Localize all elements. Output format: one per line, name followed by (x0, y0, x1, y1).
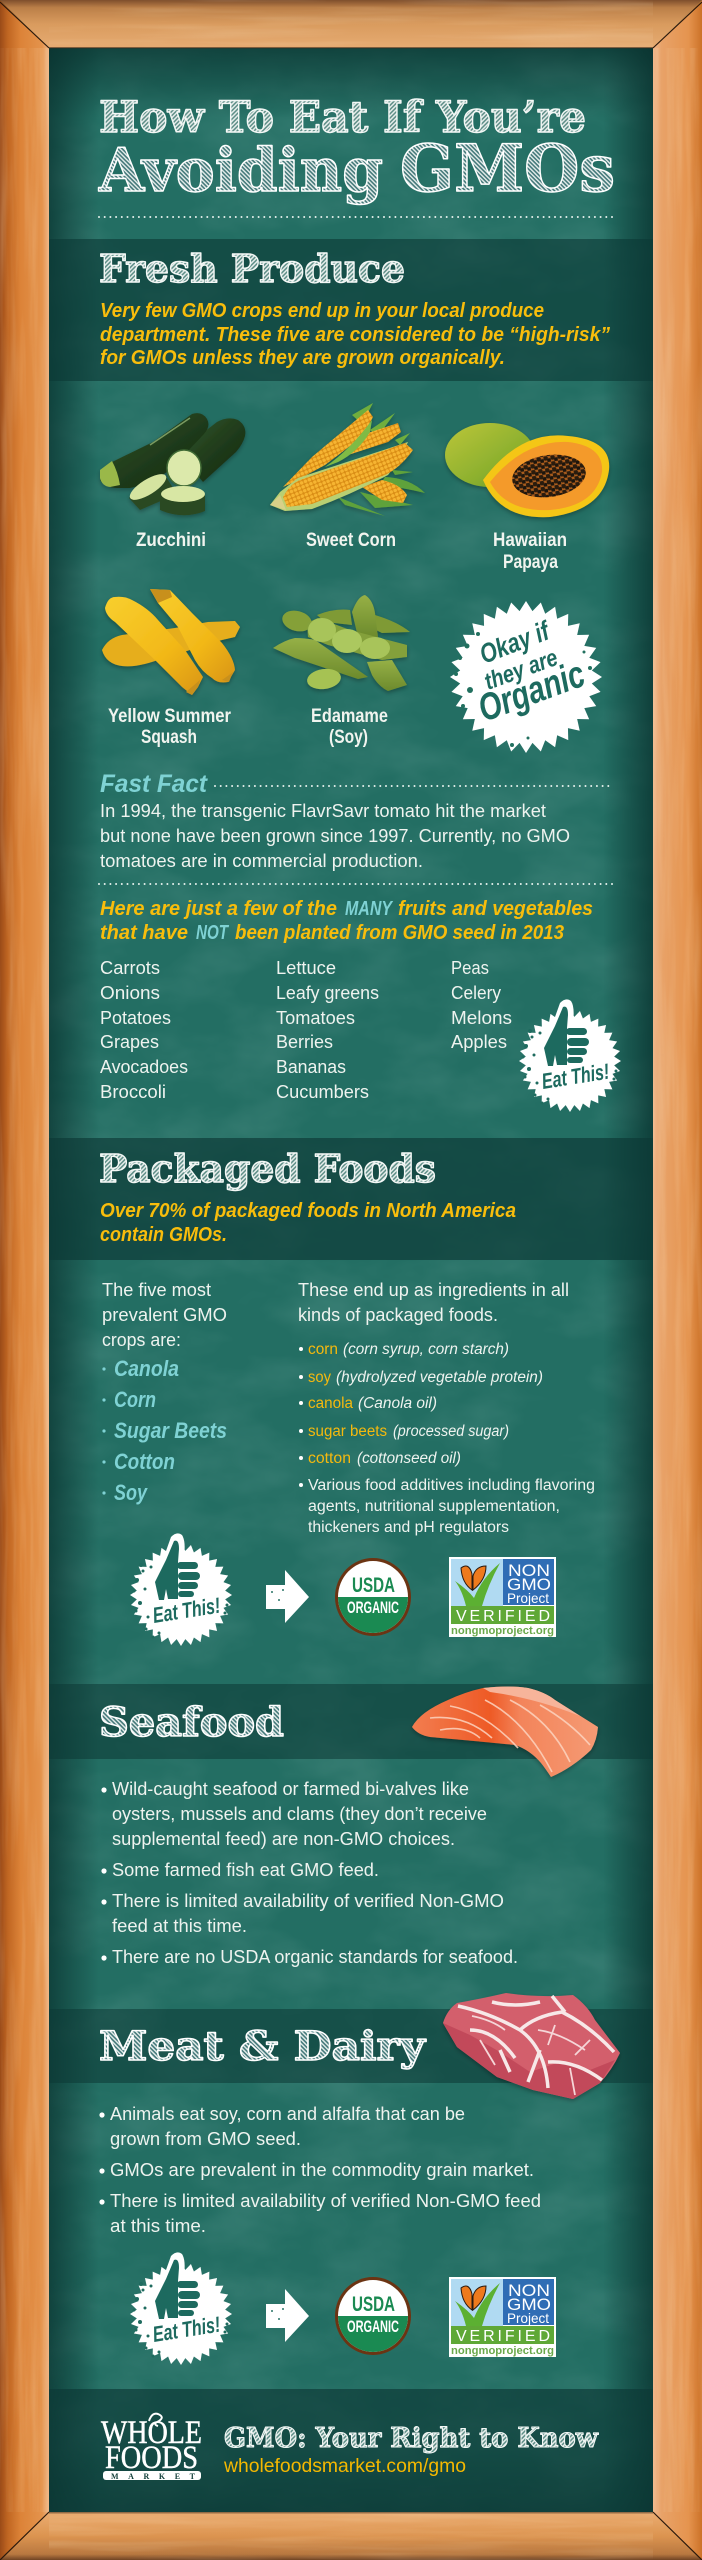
list: column two: Tomatoes (276, 1008, 355, 1028)
list: column three: Melons (451, 1008, 512, 1028)
text: non-GMO fruits and vegetables intro: Here are just a few of the (100, 898, 337, 920)
band: footer (49, 2389, 653, 2512)
food: salmon (412, 1686, 598, 1777)
text: fast fact body: but none have been grown since 1997. Currently, no GMO (100, 826, 570, 846)
logo: non-GMO project verified: GMO (507, 2295, 551, 2314)
list: ingredient bullets: agents, nutritional supplementation, (308, 1498, 560, 1515)
list: ingredient bullets: canola (308, 1395, 353, 1412)
list: ingredient bullets (299, 1341, 595, 1536)
list: column one: Broccoli (100, 1082, 166, 1102)
logo: USDA organic (335, 1558, 411, 1636)
intro text: fresh produce: for GMOs unless they are grown organically. (100, 347, 505, 369)
text: fast fact body (100, 801, 570, 871)
text: non-GMO fruits and vegetables intro: MANY (345, 898, 393, 920)
text: ingredients intro: kinds of packaged foods. (298, 1305, 498, 1325)
badge: eat this (meat) (130, 2252, 232, 2365)
list: ingredient bullets: (cottonseed oil) (357, 1450, 461, 1467)
food labels: row one (136, 530, 567, 573)
text: ingredients intro (298, 1280, 569, 1325)
list: seafood bullets: There are no USDA organic standards for seafood. (112, 1947, 518, 1967)
list: column one: Potatoes (100, 1008, 171, 1028)
list: seafood bullets (101, 1779, 518, 1967)
logo: USDA organic: USDA (352, 2293, 395, 2316)
title: How To Eat If You’re (99, 93, 586, 143)
text: five prevalent crops: crops are: (102, 1330, 181, 1350)
text: five prevalent crops (102, 1280, 227, 1350)
list: five GMO crops (102, 1356, 227, 1505)
intro text: fresh produce (100, 300, 610, 369)
food: edamame (273, 595, 410, 691)
list: five GMO crops: Cotton (114, 1449, 175, 1474)
logo: non-GMO project verified: nongmoproject.org (451, 2345, 554, 2357)
logo: USDA organic: ORGANIC (347, 2317, 399, 2336)
intro text: fresh produce: Very few GMO crops end up in your local produce (100, 300, 544, 322)
logo: non-GMO project verified: Project (507, 1590, 549, 1606)
list: column three: Celery (451, 983, 501, 1003)
heading: fast fact: Fast Fact (100, 770, 209, 798)
list: column two: Cucumbers (276, 1082, 369, 1102)
list: seafood bullets: feed at this time. (112, 1916, 247, 1936)
footer link: wholefoodsmarket.com/gmo (223, 2455, 466, 2477)
list: ingredient bullets: soy (308, 1369, 331, 1386)
badge: eat this (produce): Eat This! (540, 1059, 611, 1094)
food labels: row one: Hawaiian (493, 530, 567, 551)
list: ingredient bullets: cotton (308, 1450, 351, 1467)
list: column one: Onions (100, 983, 160, 1003)
food labels: row one: Papaya (503, 552, 558, 573)
badge: eat this (packaged) (130, 1533, 232, 1646)
text: ingredients intro: These end up as ingredients in all (298, 1280, 569, 1300)
logo: non-GMO project verified: NON (508, 2281, 550, 2300)
badge: eat this (produce) (519, 999, 621, 1112)
title (98, 93, 615, 207)
band: meat and dairy header (49, 2009, 653, 2083)
list: five GMO crops: Sugar Beets (114, 1418, 227, 1443)
list: column one: Carrots (100, 958, 160, 978)
logo: whole foods market (101, 2414, 202, 2481)
logo: non-GMO project verified: NON (508, 1561, 550, 1580)
food: yellow summer squash (102, 589, 240, 695)
intro text: packaged foods: Over 70% of packaged foods in North America (100, 1200, 516, 1222)
list: five GMO crops: Corn (114, 1387, 156, 1412)
badge: eat this (meat): Eat This! (151, 2312, 222, 2347)
list: column three (451, 958, 512, 1052)
logo: whole foods market: FOODS (105, 2440, 198, 2476)
list: meat and dairy bullets: There is limited availability of verified Non-GMO feed (110, 2191, 541, 2211)
heading: fresh produce: Fresh Produce (99, 246, 405, 291)
logo: non-GMO project verified (449, 1557, 556, 1637)
logo: USDA organic (335, 2277, 411, 2355)
food: sweet corn (270, 403, 425, 516)
arrow (266, 1570, 309, 1623)
list: column three: Apples (451, 1032, 507, 1052)
text: non-GMO fruits and vegetables intro: fruits and vegetables (398, 898, 593, 920)
heading: packaged foods: Packaged Foods (99, 1146, 436, 1191)
list: column two (276, 958, 379, 1102)
logo: whole foods market: WHOLE (101, 2415, 202, 2451)
list: seafood bullets: Wild-caught seafood or farmed bi-valves like (112, 1779, 469, 1799)
list: meat and dairy bullets: grown from GMO seed. (110, 2129, 301, 2149)
list: column two: Leafy greens (276, 983, 379, 1003)
logo: whole foods market: MARKET (111, 2472, 196, 2481)
food labels: row two: Edamame (311, 706, 388, 727)
list: meat and dairy bullets (99, 2104, 541, 2236)
text: non-GMO fruits and vegetables intro: that have (100, 922, 188, 944)
footer heading: GMO: Your Right to Know (224, 2423, 599, 2454)
list: meat and dairy bullets: Animals eat soy, corn and alfalfa that can be (110, 2104, 465, 2124)
badge: okay if organic: Organic (473, 653, 590, 730)
list: seafood bullets: supplemental feed) are non-GMO choices. (112, 1829, 455, 1849)
list: ingredient bullets: (processed sugar) (393, 1423, 509, 1440)
list: column two: Bananas (276, 1057, 346, 1077)
food labels: row one: Zucchini (136, 530, 206, 551)
list: five GMO crops: Canola (114, 1356, 179, 1381)
list: column one: Grapes (100, 1032, 159, 1052)
list: ingredient bullets: corn (308, 1341, 338, 1358)
logo: non-GMO project verified: nongmoproject.org (451, 1625, 554, 1637)
text: five prevalent crops: The five most (102, 1280, 211, 1300)
band: packaged foods header (49, 1138, 653, 1260)
food labels: row two (108, 706, 388, 748)
title: GMOs (400, 131, 615, 207)
food labels: row one: Sweet Corn (306, 530, 396, 551)
band: seafood header (49, 1684, 653, 1759)
list: meat and dairy bullets: at this time. (110, 2216, 206, 2236)
list: five GMO crops: Soy (114, 1480, 148, 1505)
food: hawaiian papaya (445, 423, 609, 517)
band: fresh produce header (49, 239, 653, 381)
food: zucchini (100, 413, 245, 515)
heading: meat and dairy: Meat & Dairy (99, 2023, 427, 2070)
text: fast fact body: In 1994, the transgenic FlavrSavr tomato hit the market (100, 801, 546, 821)
badge: eat this (packaged): Eat This! (151, 1593, 222, 1628)
title: Avoiding (98, 136, 383, 206)
heading: seafood: Seafood (99, 1699, 284, 1746)
badge: okay if organic: they are (481, 644, 561, 696)
list: column two: Berries (276, 1032, 333, 1052)
logo: non-GMO project verified: Project (507, 2310, 549, 2326)
list: ingredient bullets: Various food additives including flavoring (308, 1477, 595, 1494)
logo: USDA organic: ORGANIC (347, 1598, 399, 1617)
list: ingredient bullets: thickeners and pH regulators (308, 1519, 509, 1536)
list: seafood bullets: Some farmed fish eat GMO feed. (112, 1860, 379, 1880)
list: ingredient bullets: sugar beets (308, 1423, 387, 1440)
list: column one (100, 958, 188, 1102)
badge: okay if organic: Okay if (475, 615, 556, 670)
list: ingredient bullets: (Canola oil) (358, 1395, 437, 1412)
list: column three: Peas (451, 958, 489, 978)
intro text: packaged foods (100, 1200, 516, 1246)
badge: okay if organic (450, 601, 602, 753)
food: meat (443, 1993, 620, 2099)
list: ingredient bullets: (corn syrup, corn starch) (343, 1341, 509, 1358)
list: ingredient bullets: (hydrolyzed vegetable protein) (336, 1369, 543, 1386)
logo: USDA organic: USDA (352, 1574, 395, 1597)
logo: non-GMO project verified (449, 2277, 556, 2357)
list: column two: Lettuce (276, 958, 336, 978)
food labels: row two: (Soy) (329, 727, 368, 748)
logo: non-GMO project verified: VERIFIED (456, 1608, 550, 1625)
logo: non-GMO project verified: VERIFIED (456, 2328, 550, 2345)
food labels: row two: Squash (141, 727, 197, 748)
text: non-GMO fruits and vegetables intro (100, 898, 593, 944)
logo: non-GMO project verified: GMO (507, 1575, 551, 1594)
text: fast fact body: tomatoes are in commercial production. (100, 851, 423, 871)
arrow (266, 2289, 309, 2342)
intro text: fresh produce: department. These five are considered to be “high-risk” (100, 324, 610, 346)
text: non-GMO fruits and vegetables intro: NOT (196, 922, 229, 944)
list: seafood bullets: There is limited availability of verified Non-GMO (112, 1891, 504, 1911)
text: non-GMO fruits and vegetables intro: been planted from GMO seed in 2013 (235, 922, 564, 944)
list: meat and dairy bullets: GMOs are prevalent in the commodity grain market. (110, 2160, 534, 2180)
list: column one: Avocadoes (100, 1057, 188, 1077)
intro text: packaged foods: contain GMOs. (100, 1224, 227, 1246)
food labels: row two: Yellow Summer (108, 706, 232, 727)
text: five prevalent crops: prevalent GMO (102, 1305, 227, 1325)
list: seafood bullets: oysters, mussels and clams (they don’t receive (112, 1804, 487, 1824)
